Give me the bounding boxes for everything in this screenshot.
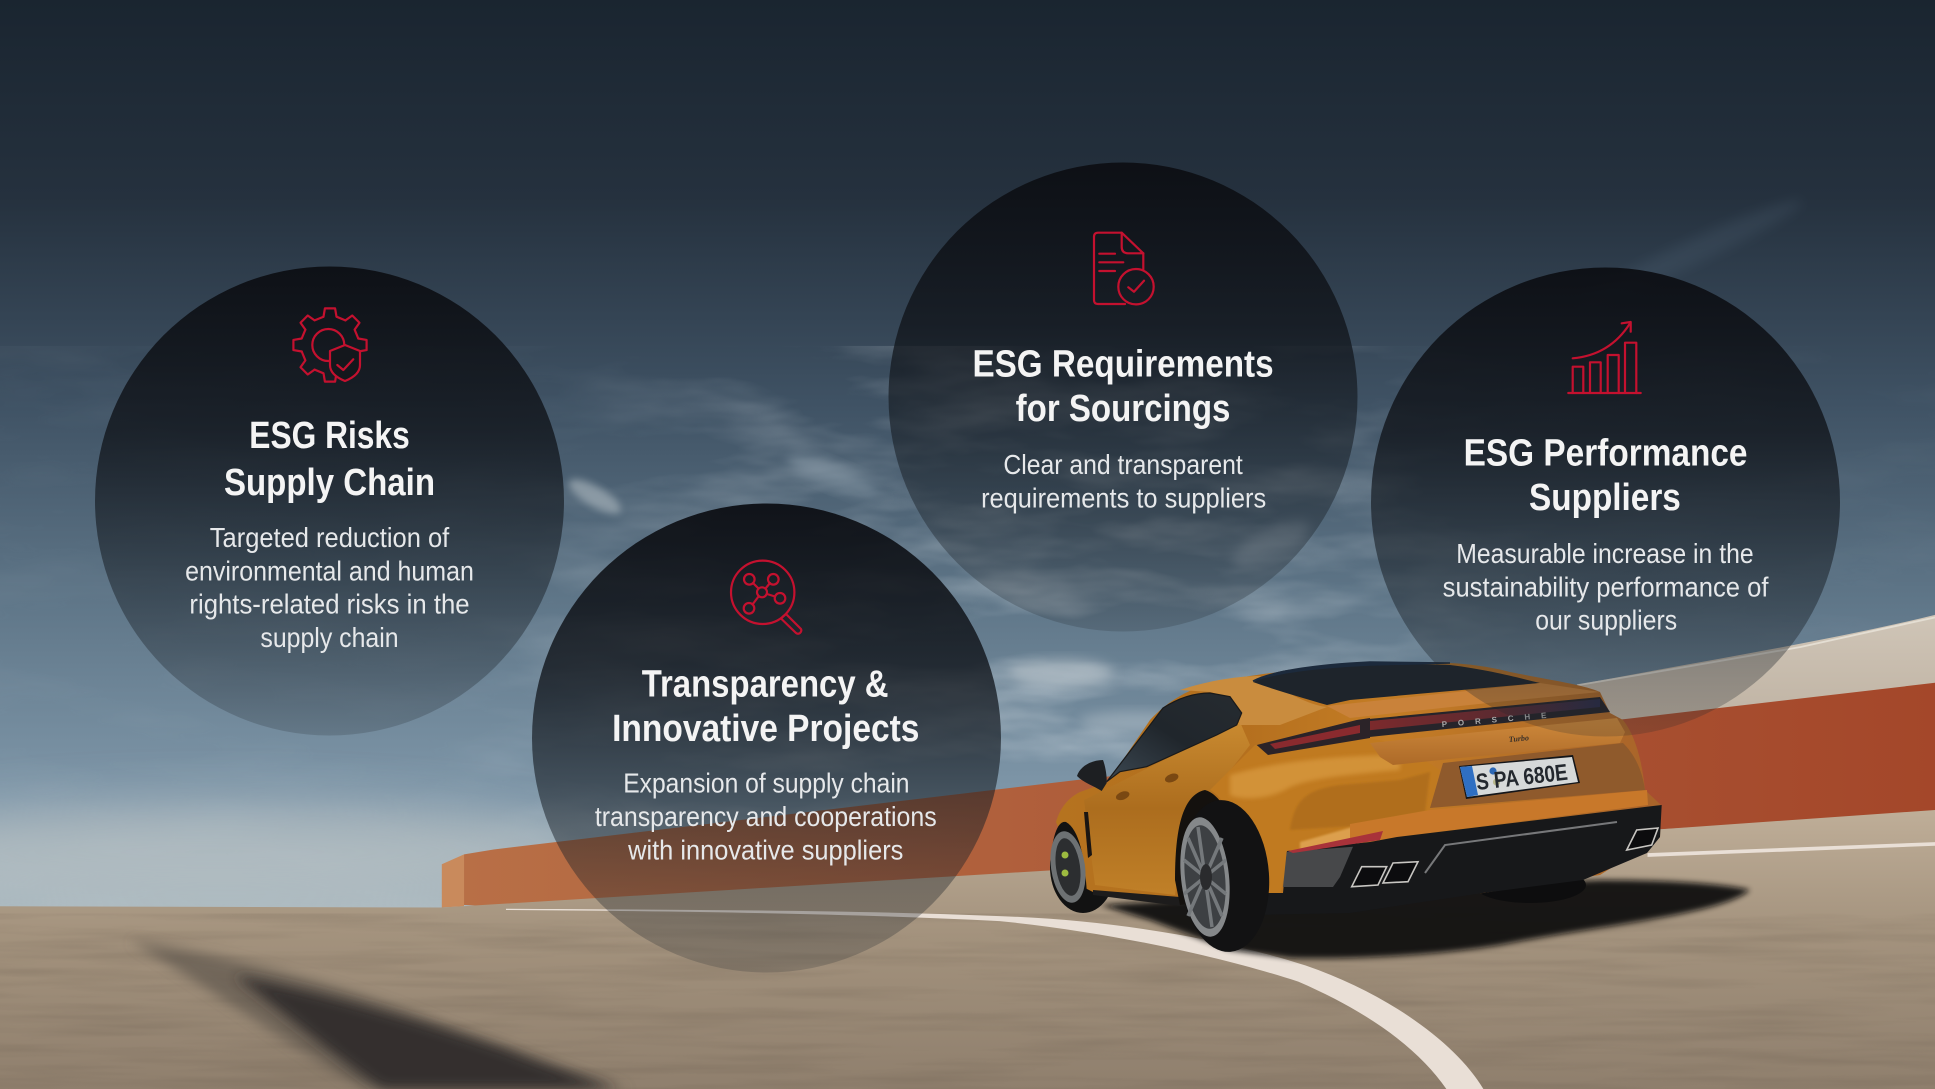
body text: environmental and human (185, 555, 474, 586)
body text (185, 522, 474, 653)
trunk lid (1370, 718, 1625, 765)
ground (0, 810, 1935, 1089)
body text: sustainability performance of (1443, 571, 1769, 602)
roof strip (1253, 662, 1450, 681)
side sill (1093, 890, 1180, 906)
door details (1084, 772, 1180, 858)
side windows (1107, 693, 1242, 782)
panel: ESG Performance Suppliers (1371, 268, 1840, 736)
roof and shoulder highlight (1180, 676, 1327, 725)
icon: magnifier with network (731, 561, 801, 634)
body text: Expansion of supply chain (623, 768, 910, 799)
car (1046, 662, 1750, 958)
terracotta barrier wall (464, 683, 1935, 906)
body text (595, 768, 937, 865)
light bar (1358, 697, 1610, 738)
heading: ESG Risks (249, 414, 410, 457)
heading: Supply Chain (224, 461, 435, 504)
heading: ESG Performance (1464, 431, 1747, 474)
red reflector (1288, 831, 1383, 853)
heading (224, 414, 435, 504)
heading: for Sourcings (1016, 387, 1230, 430)
icon: document with check (1094, 233, 1154, 304)
icon: gear with shield (293, 308, 367, 382)
rear haunch (1210, 738, 1440, 895)
body text: Measurable increase in the (1456, 538, 1754, 569)
body text: Clear and transparent (1003, 449, 1243, 480)
left exhaust tips (1352, 862, 1418, 887)
body text: requirements to suppliers (981, 482, 1266, 513)
car body (1056, 662, 1661, 915)
right exhaust tip (1627, 828, 1658, 850)
body text: with innovative suppliers (627, 834, 903, 865)
heading (612, 662, 919, 750)
licence plate: S PA 680E (1475, 759, 1569, 795)
door panels (1084, 722, 1250, 895)
haunch highlights (1230, 755, 1400, 798)
front wheel (1046, 822, 1090, 905)
body text: our suppliers (1535, 605, 1677, 636)
heading (1464, 431, 1747, 519)
brand lettering: PORSCHE (1441, 711, 1547, 729)
body text: transparency and cooperations (595, 801, 937, 832)
body text: supply chain (260, 622, 399, 653)
badge: Turbo (1508, 733, 1529, 744)
far rear wheel (1474, 867, 1586, 903)
panel: ESG Requirements for Sourcings (888, 162, 1358, 632)
rear window (1253, 664, 1540, 705)
deck lid (1327, 683, 1600, 718)
heading: Transparency & (642, 662, 889, 705)
body text (1443, 538, 1769, 636)
body text: Targeted reduction of (210, 522, 449, 553)
grey bumper corner (1283, 847, 1353, 887)
left tail light (1257, 718, 1370, 755)
heading (972, 343, 1274, 430)
rear wheel (1175, 790, 1274, 955)
road marking (506, 909, 1483, 1089)
diffuser (1425, 822, 1617, 873)
body text (981, 449, 1266, 513)
side skirt of bumper (1253, 805, 1662, 915)
scoop highlight (1300, 812, 1430, 850)
heading: Suppliers (1529, 476, 1681, 519)
panel: Transparency and Innovative Projects (532, 504, 1001, 972)
heading: Innovative Projects (612, 707, 919, 750)
rear panel (1430, 743, 1645, 808)
mirror (1077, 760, 1107, 791)
lower orange lip (1350, 790, 1648, 845)
rear scoop (1290, 772, 1430, 830)
icon: rising bar chart (1568, 322, 1641, 393)
heading: ESG Requirements (972, 343, 1274, 386)
beige upper ramp wall (1530, 615, 1935, 741)
body text: rights-related risks in the (189, 589, 470, 620)
panel: ESG Risks Supply Chain (95, 266, 564, 736)
front tyre (1050, 821, 1116, 913)
